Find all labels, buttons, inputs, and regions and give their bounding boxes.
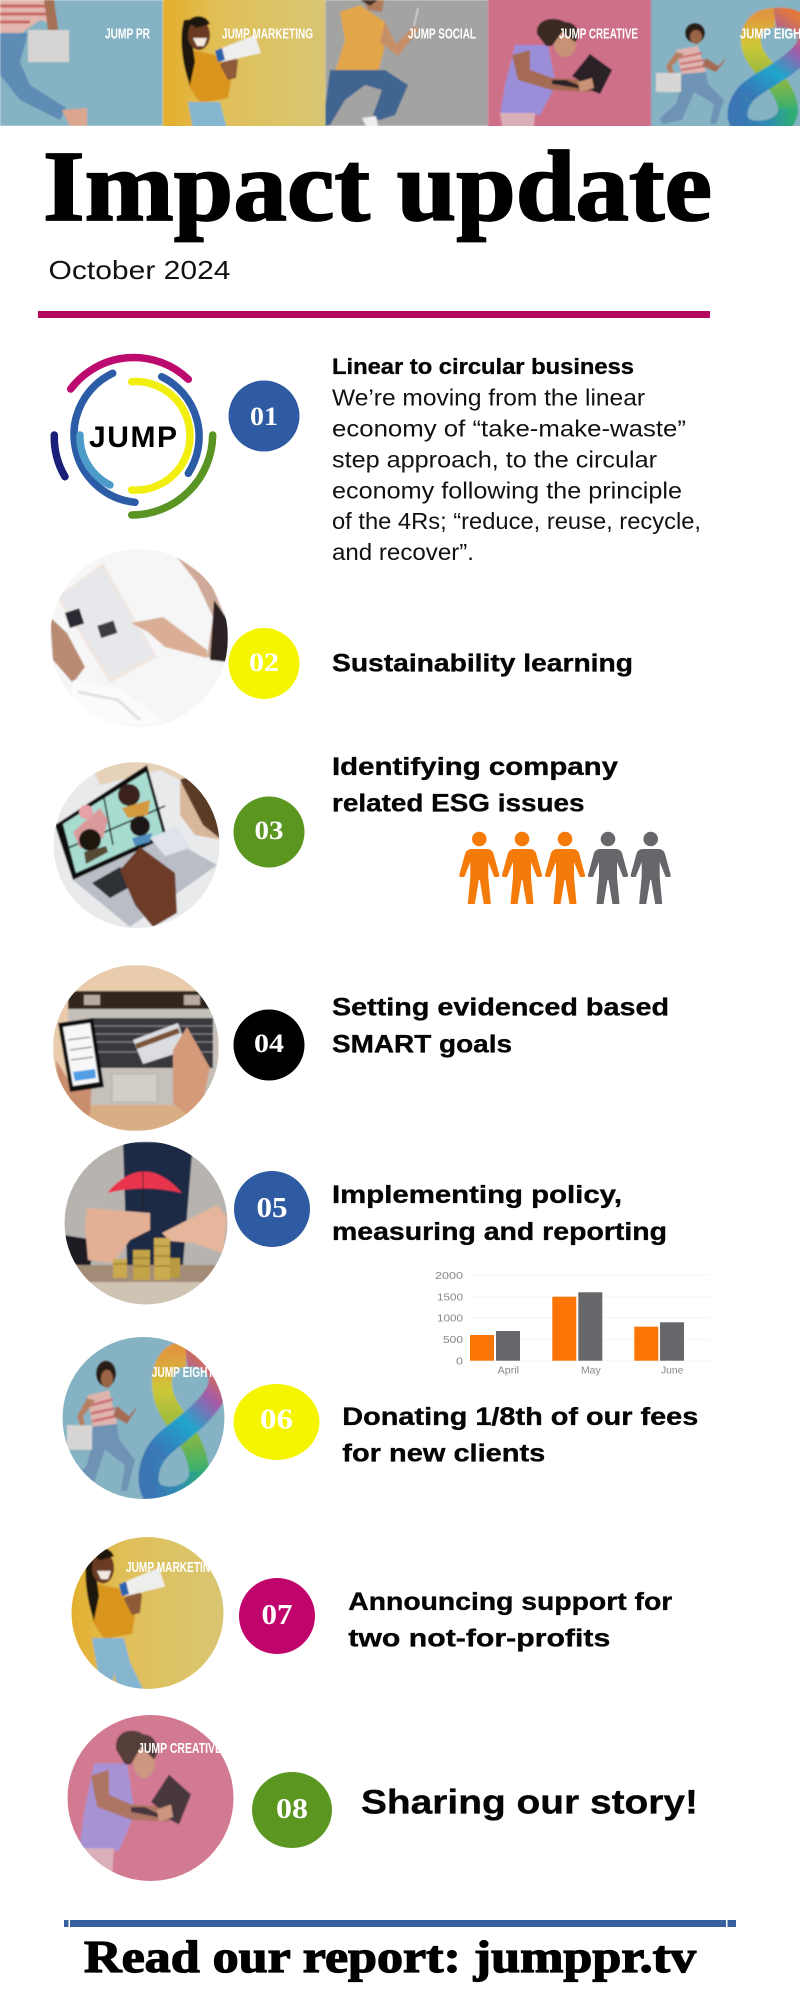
badge 08: 08 (276, 1793, 308, 1825)
label: JUMP SOCIAL: JUMP SOCIAL (408, 26, 476, 43)
badge 04 (234, 1010, 304, 1080)
bar chart: 2000 (435, 1271, 464, 1282)
heading: policy: Implementing policy, (332, 1181, 622, 1209)
badge 06: 06 (260, 1403, 293, 1435)
heading: policy: measuring and reporting (332, 1218, 667, 1246)
heading: sustainability: Sustainability learning (332, 650, 633, 678)
text: linear to circular: of the 4Rs; “reduce, reuse, recycle, (332, 508, 701, 534)
item 07 (72, 1537, 672, 1689)
badge 02: 02 (249, 648, 279, 677)
heading: ESG (332, 753, 618, 818)
item 06 (62, 1337, 698, 1499)
heading: announcing: Announcing support for (348, 1588, 673, 1616)
heading: donating: Donating 1/8th of our fees (342, 1403, 698, 1431)
bar chart: 500 (443, 1335, 464, 1346)
heading: SMART goals: Setting evidenced based (332, 994, 669, 1022)
banner: JUMP brand panels (0, 0, 800, 126)
badge 01: 01 (250, 402, 278, 431)
badge 02 (228, 628, 300, 699)
heading: policy (332, 1181, 667, 1246)
heading: ESG: Identifying company (332, 753, 618, 781)
badge 03 (234, 796, 304, 868)
footer: call to action: Read our report: jumppr.tv (84, 1931, 696, 1982)
text: linear to circular: Linear to circular business (332, 354, 634, 379)
panel: JUMP CREATIVE (487, 0, 652, 126)
text: linear to circular (332, 354, 701, 565)
label: JUMP MARKETING: JUMP MARKETING (222, 26, 313, 43)
bar chart (435, 1271, 710, 1376)
badge 08 (252, 1772, 332, 1848)
heading: announcing: two not-for-profits (348, 1625, 610, 1653)
photo: tablet (50, 549, 228, 727)
bar chart: May (581, 1365, 601, 1376)
item 05 (64, 1142, 710, 1376)
photo: JUMP CREATIVE (68, 1715, 234, 1881)
heading: donating (342, 1403, 698, 1468)
bar chart: April (498, 1365, 519, 1376)
heading: SMART goals (332, 994, 669, 1058)
heading: announcing (348, 1588, 673, 1653)
bar chart: 0 (456, 1356, 464, 1368)
bar chart: 1500 (437, 1292, 464, 1304)
text: linear to circular: step approach, to the circular (332, 446, 657, 472)
photo: umbrella over coins (64, 1142, 228, 1306)
panel: JUMP PR (0, 0, 163, 126)
badge 04: 04 (254, 1029, 284, 1058)
photo: JUMP EIGHT (62, 1337, 224, 1499)
photo: JUMP MARKETING: JUMP MARKETING (126, 1559, 218, 1576)
badge 07: 07 (262, 1599, 292, 1631)
text: linear to circular: We’re moving from the linear (332, 385, 645, 411)
icon: JUMP logo: JUMP (89, 421, 177, 454)
item 01 (54, 354, 701, 565)
badge 06 (234, 1384, 320, 1460)
heading: sharing: Sharing our story! (361, 1783, 698, 1821)
photo: payment (53, 965, 219, 1131)
panel: JUMP MARKETING (162, 0, 326, 126)
badge 07 (239, 1578, 315, 1654)
badge 03: 03 (254, 816, 284, 845)
item 04 (53, 965, 669, 1131)
text: linear to circular: and recover”. (332, 539, 474, 565)
heading: SMART goals: SMART goals (332, 1030, 512, 1058)
badge 05: 05 (256, 1192, 288, 1224)
item 03 (53, 753, 671, 930)
badge 01 (228, 380, 300, 452)
date: October 2024 (48, 255, 230, 285)
label: JUMP CREATIVE: JUMP CREATIVE (559, 26, 638, 43)
text: linear to circular: economy of “take-make-waste” (332, 416, 686, 442)
photo: JUMP CREATIVE: JUMP CREATIVE (138, 1740, 222, 1757)
divider: blue (64, 1920, 736, 1927)
photo: JUMP EIGHT: JUMP EIGHT (152, 1364, 214, 1381)
label: JUMP PR: JUMP PR (105, 26, 150, 43)
text: linear to circular: economy following the principle (332, 477, 682, 503)
photo: video call (53, 762, 222, 930)
bar chart: 1000 (437, 1314, 464, 1324)
item 08 (68, 1715, 694, 1881)
photo: JUMP MARKETING (72, 1537, 224, 1689)
title: Impact update (43, 130, 712, 242)
panel: JUMP EIGHT (650, 0, 800, 126)
heading: ESG: related ESG issues (332, 790, 584, 818)
divider: magenta (38, 311, 710, 318)
icon: five people (459, 832, 671, 904)
item 02 (50, 549, 633, 727)
badge 05 (234, 1171, 310, 1247)
icon: JUMP logo (54, 358, 213, 515)
bar chart: June (661, 1365, 684, 1376)
heading: donating: for new clients (342, 1440, 545, 1468)
panel: JUMP SOCIAL (326, 0, 488, 126)
